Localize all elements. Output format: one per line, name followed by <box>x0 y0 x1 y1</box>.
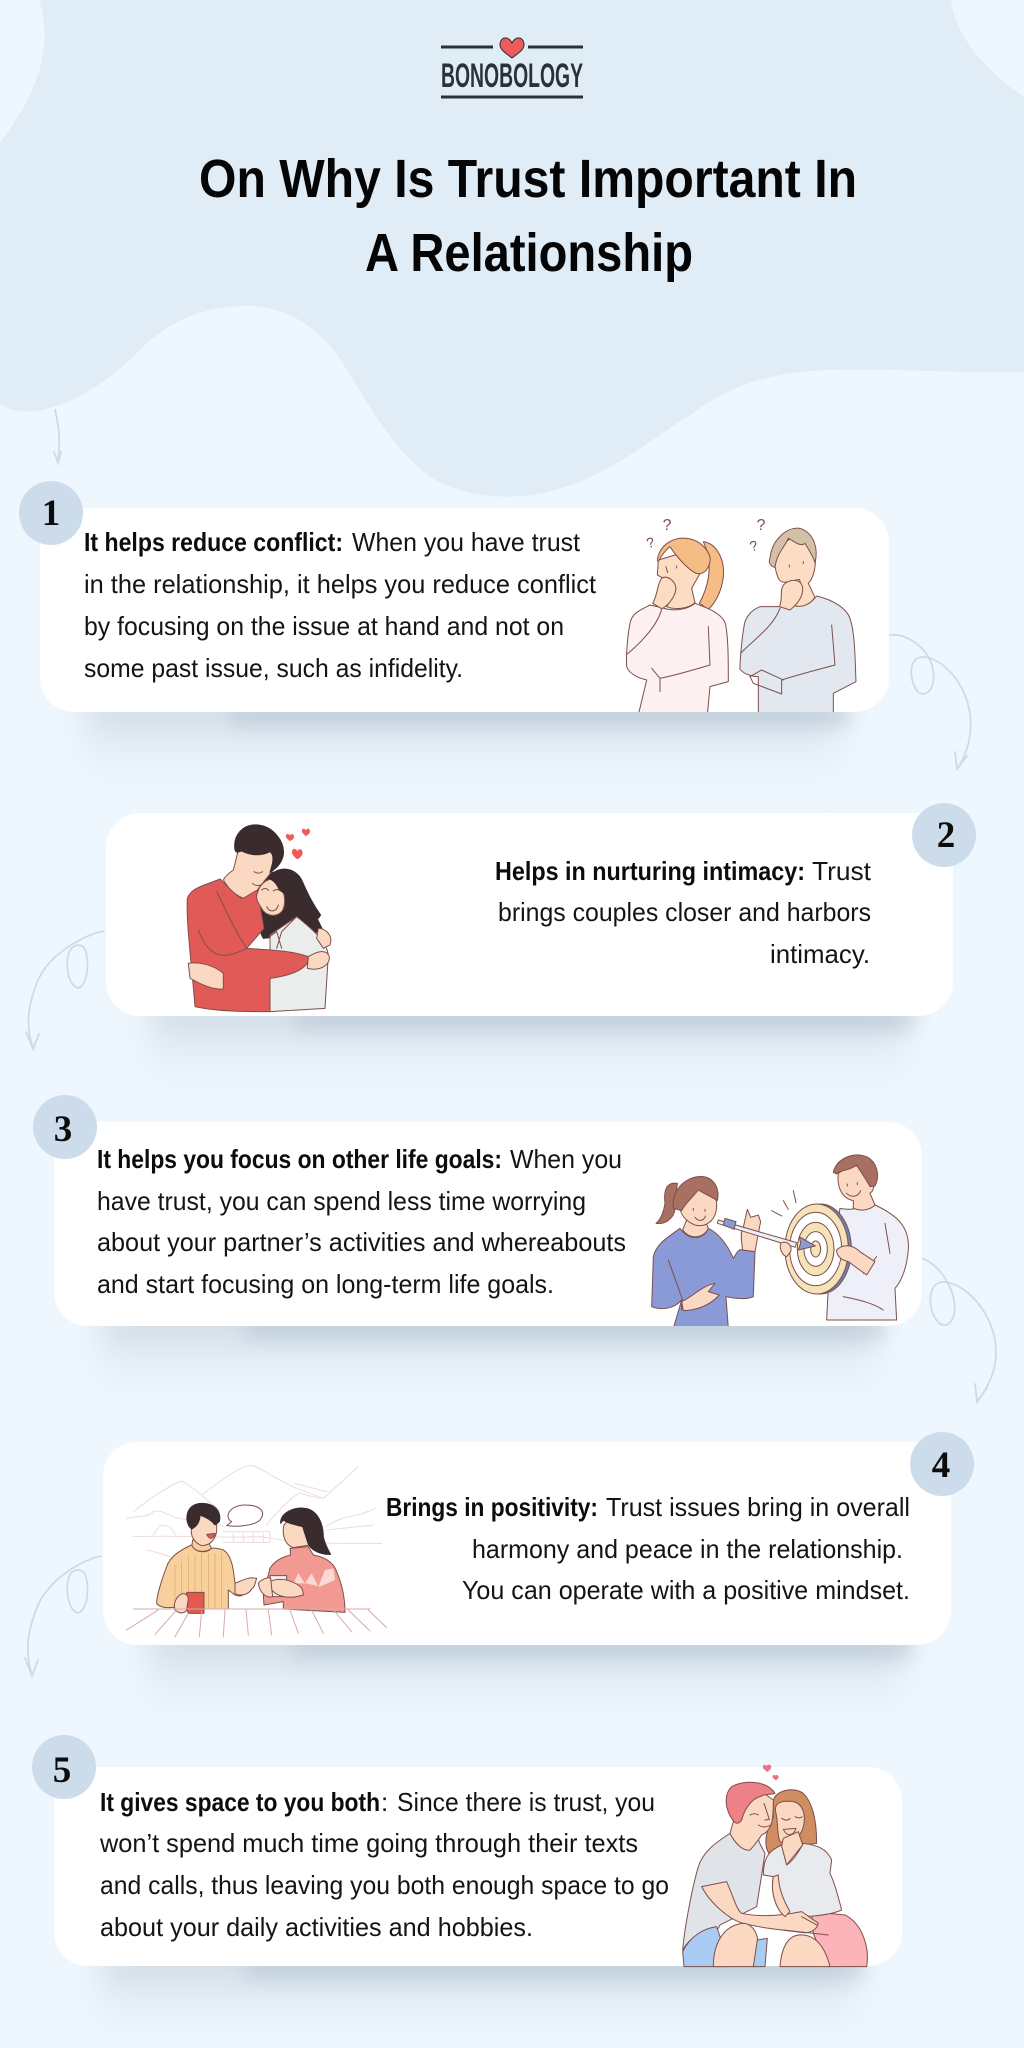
number badge 5 <box>32 1735 96 1799</box>
text: positivity: Brings in positivity: <box>386 1492 598 1522</box>
text: reduce conflict: It helps reduce conflict: <box>84 527 343 557</box>
text: nurturing intimacy: Helps in nurturing intimacy: <box>495 856 805 886</box>
logo: BONOBOLOGY <box>441 57 583 95</box>
text: gives space: about your daily activities and hobbies. <box>100 1912 533 1942</box>
illustration: couple talking over coffee <box>127 1466 387 1637</box>
illustration: couple with target <box>652 1155 908 1328</box>
text: reduce conflict: When you have trust <box>352 527 581 557</box>
text: life goals: When you <box>510 1144 622 1174</box>
illustration: thinking couple: ? <box>644 534 656 551</box>
text: gives space <box>99 1787 669 1942</box>
arrow: card 3 to card 4 <box>921 1258 996 1402</box>
text: reduce conflict: some past issue, such as infidelity. <box>84 653 463 683</box>
text: reduce conflict: by focusing on the issue at hand and not on <box>84 611 564 641</box>
illustration: embracing couple <box>683 1765 867 1967</box>
text: life goals: have trust, you can spend less time worrying <box>97 1186 586 1216</box>
text: gives space: won’t spend much time going through their texts <box>99 1828 638 1858</box>
number badge 3 <box>33 1095 97 1159</box>
arrow: card 2 to card 3 <box>26 931 104 1049</box>
number badge 5: 5 <box>53 1750 71 1791</box>
panel: card 1 <box>19 481 889 754</box>
text: nurturing intimacy: intimacy. <box>770 939 870 969</box>
number badge 4: 4 <box>932 1445 950 1486</box>
text: life goals: It helps you focus on other life goals: <box>97 1144 502 1174</box>
text: positivity: harmony and peace in the relationship. <box>472 1534 903 1564</box>
text: nurturing intimacy: brings couples closer and harbors <box>498 897 871 927</box>
panel: card 3 <box>33 1095 922 1368</box>
panel: card 2 <box>106 803 976 1058</box>
text: gives space: Since there is trust, you <box>397 1787 655 1817</box>
illustration: thinking couple <box>626 517 856 715</box>
illustration: thinking couple: ? <box>748 537 760 554</box>
icon: heart <box>500 38 524 58</box>
text: gives space: and calls, thus leaving you both enough space to go <box>100 1870 669 1900</box>
illustration: hugging couple <box>187 825 331 1012</box>
text: positivity: You can operate with a positive mindset. <box>462 1575 910 1605</box>
number badge 1: 1 <box>42 493 60 534</box>
header wave background <box>0 0 1024 497</box>
text: life goals: about your partner’s activities and whereabouts <box>97 1227 626 1257</box>
text: positivity: Trust issues bring in overall <box>606 1492 910 1522</box>
text: life goals <box>97 1144 626 1299</box>
number badge 1 <box>19 481 83 545</box>
panel: card 4 <box>103 1432 974 1687</box>
text: reduce conflict <box>84 527 597 683</box>
number badge 2 <box>912 803 976 867</box>
illustration: thinking couple: ? <box>757 517 766 534</box>
number badge 2: 2 <box>937 815 955 856</box>
title: On Why Is Trust Important In <box>199 149 857 209</box>
arrow: card 1 to card 2 <box>889 635 971 769</box>
text: gives space: : <box>381 1787 388 1817</box>
text: reduce conflict: in the relationship, it helps you reduce conflict <box>84 569 597 599</box>
illustration: thinking couple: ? <box>663 517 672 534</box>
arrow: into card 1 <box>54 410 61 463</box>
text: life goals: and start focusing on long-term life goals. <box>97 1269 554 1299</box>
number badge 4 <box>910 1432 974 1496</box>
text: positivity <box>386 1492 910 1605</box>
arrow: card 4 to card 5 <box>25 1556 101 1676</box>
logo <box>441 38 583 97</box>
text: gives space: It gives space to you both <box>100 1787 380 1817</box>
number badge 3: 3 <box>54 1109 72 1150</box>
title <box>199 149 857 283</box>
panel: card 5 <box>32 1735 902 2044</box>
text: nurturing intimacy: Trust <box>812 856 872 886</box>
text: nurturing intimacy <box>495 856 872 969</box>
title: A Relationship <box>365 223 693 283</box>
